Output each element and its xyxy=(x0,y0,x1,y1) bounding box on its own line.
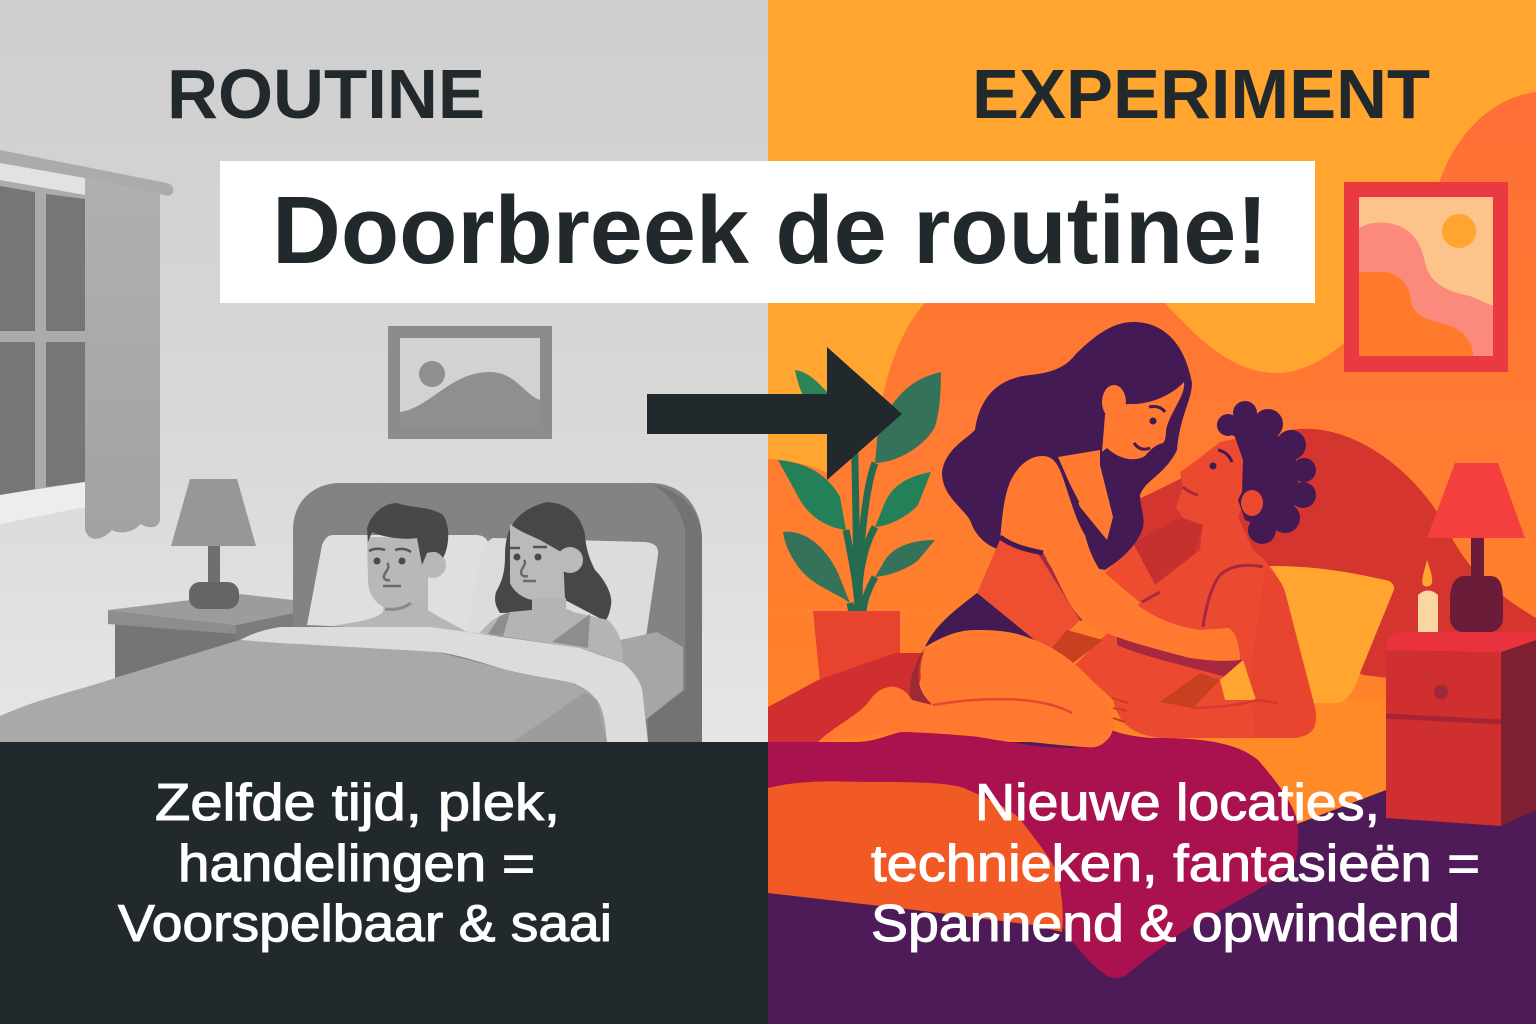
heading: experiment: EXPERIMENT xyxy=(972,55,1430,133)
blanket xyxy=(0,627,648,742)
panel: experiment (colourful bedroom) xyxy=(768,0,1536,1024)
heading: routine: ROUTINE xyxy=(167,55,485,133)
caption background xyxy=(768,700,1536,1024)
man's curly hair xyxy=(1217,401,1316,544)
icon: window xyxy=(0,150,174,524)
man figure xyxy=(1075,401,1316,738)
bed xyxy=(768,648,933,742)
icon: candle xyxy=(1418,560,1438,634)
bed xyxy=(293,483,702,742)
text block: routine caption: handelingen = xyxy=(178,835,535,893)
title banner: Doorbreek de routine! xyxy=(272,177,1268,284)
icon: curtain xyxy=(85,177,160,539)
text block: experiment caption: Nieuwe locaties, xyxy=(975,774,1380,832)
icon: plant xyxy=(778,370,941,682)
text block: routine caption: Voorspelbaar & saai xyxy=(118,895,612,953)
icon: table lamp xyxy=(171,479,256,609)
man in bed xyxy=(333,503,467,632)
icon: bedside table xyxy=(108,594,293,678)
icon: nightstand xyxy=(1386,632,1536,826)
text block: experiment caption: Spannend & opwindend xyxy=(871,895,1460,953)
text block: experiment caption xyxy=(871,774,1480,953)
headboard xyxy=(1125,429,1536,700)
woman in bed xyxy=(480,502,623,662)
text block: routine caption: Zelfde tijd, plek, xyxy=(155,774,560,832)
pillow xyxy=(1250,566,1394,703)
text block: routine caption xyxy=(118,774,612,953)
text block: experiment caption: technieken, fantasieën = xyxy=(871,835,1480,893)
background wave shapes xyxy=(768,92,1536,742)
woman figure xyxy=(818,322,1240,747)
panel: routine caption background xyxy=(0,742,768,1024)
icon: framed picture xyxy=(388,326,552,439)
icon: framed wall art xyxy=(1344,182,1508,372)
arrow xyxy=(647,347,902,480)
title banner xyxy=(220,161,1315,303)
icon: red lamp xyxy=(1427,463,1525,633)
panel: routine (grey bedroom) xyxy=(0,0,768,742)
man's ear xyxy=(1241,490,1263,516)
man's head xyxy=(1176,437,1245,525)
